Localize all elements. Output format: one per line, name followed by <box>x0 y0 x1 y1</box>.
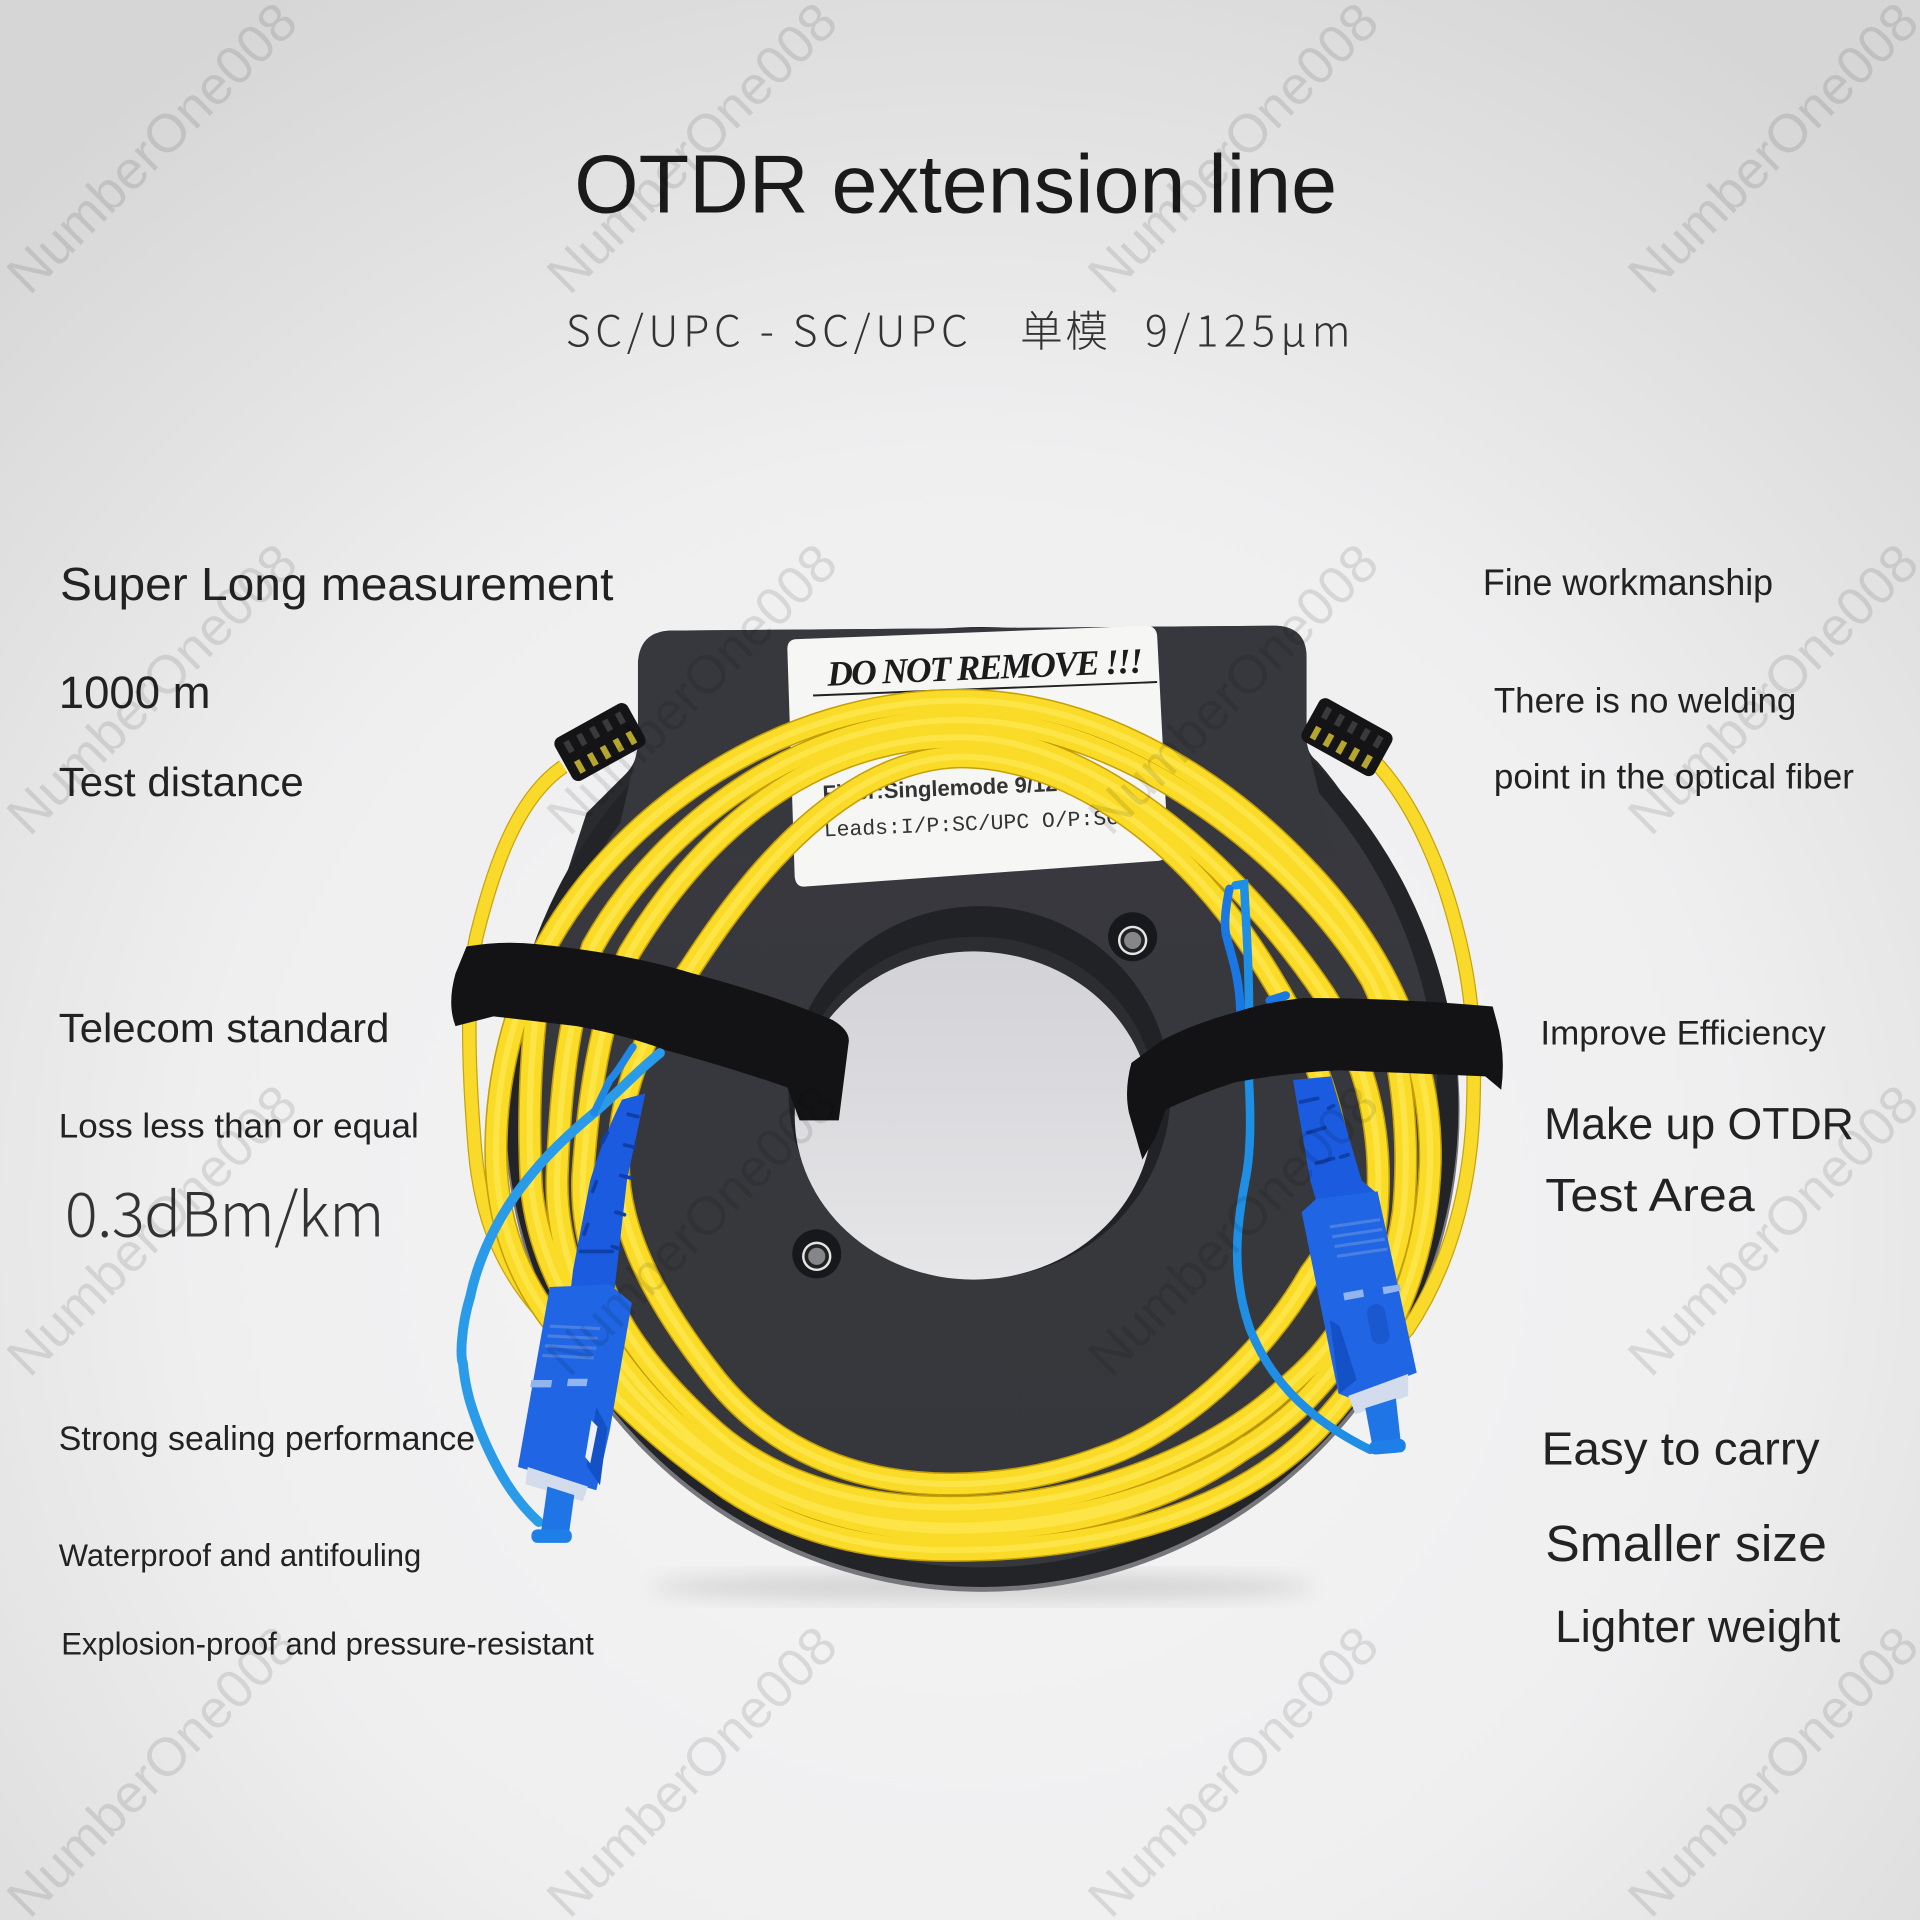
left column: telecom standard <box>59 1005 419 1255</box>
left column: sealing performance: Strong sealing performance <box>59 1420 475 1458</box>
watermark grid: NumberOne008 <box>1077 1615 1390 1920</box>
left column: telecom standard: Loss less than or equal <box>59 1108 419 1146</box>
right blue lanyard <box>1225 884 1370 1450</box>
yellow thin outer fiber loops <box>469 759 1474 1402</box>
watermark grid: NumberOne008 <box>1077 533 1390 846</box>
watermark grid: NumberOne008 <box>535 1074 849 1387</box>
right SC connector <box>1293 1076 1417 1455</box>
right column: improve efficiency: Improve Efficiency <box>1540 1014 1827 1052</box>
watermark grid: NumberOne008 <box>535 0 849 305</box>
right column: fine workmanship: point in the optical fiber <box>1494 757 1854 797</box>
reel label <box>787 626 1171 887</box>
right column: improve efficiency: Make up OTDR <box>1544 1100 1854 1149</box>
left velcro strap <box>451 943 849 1120</box>
reel label: Fiber:Singlemode 9/125um <box>822 769 1103 806</box>
left strain relief grommet <box>552 700 648 784</box>
left blue lanyard <box>461 1047 660 1522</box>
screw top right <box>1108 912 1157 961</box>
subtitle: 9/125μm <box>1145 298 1356 360</box>
screw bottom left <box>792 1229 841 1278</box>
right column: easy to carry: Easy to carry <box>1542 1422 1820 1474</box>
right column: easy to carry: Lighter weight <box>1555 1601 1841 1652</box>
right column: fine workmanship: Fine workmanship <box>1483 562 1773 603</box>
watermark grid: NumberOne008 <box>0 1074 309 1387</box>
subtitle: 单模 <box>1020 298 1111 360</box>
left column: telecom standard: Telecom standard <box>59 1005 389 1051</box>
reel shadow <box>651 1572 1313 1602</box>
left SC connector <box>518 1093 645 1543</box>
right column: easy to carry <box>1542 1422 1841 1652</box>
left column: sealing performance <box>59 1420 594 1661</box>
product: OTDR launch cable reel <box>451 626 1503 1602</box>
title: OTDR extension line <box>574 137 1337 230</box>
left column: telecom standard: 0.3dBm/km <box>65 1166 384 1255</box>
watermark grid: NumberOne008 <box>535 533 849 846</box>
watermark grid: NumberOne008 <box>1077 1074 1390 1387</box>
right column: easy to carry: Smaller size <box>1545 1514 1827 1572</box>
right velcro strap <box>1127 998 1503 1160</box>
watermark grid: NumberOne008 <box>1077 0 1390 305</box>
right column: fine workmanship <box>1483 562 1854 797</box>
left column: super long measurement: 1000 m <box>59 667 211 718</box>
reel body <box>504 626 1460 1592</box>
left column: sealing performance: Explosion-proof and pressure-resistant <box>61 1625 594 1661</box>
watermark grid: NumberOne008 <box>535 1615 849 1920</box>
subtitle: SC/UPC - SC/UPC <box>566 298 972 360</box>
right column: improve efficiency: Test Area <box>1545 1169 1755 1221</box>
right column: improve efficiency <box>1540 1014 1854 1221</box>
reel label: DO NOT REMOVE !!! <box>825 641 1144 694</box>
right column: fine workmanship: There is no welding <box>1494 681 1796 721</box>
left column: super long measurement <box>59 558 614 805</box>
reel label: Leads:I/P:SC/UPC O/P:SC/APC <box>823 805 1171 843</box>
left column: super long measurement: Test distance <box>59 759 304 805</box>
right strain relief grommet <box>1299 696 1395 779</box>
left column: super long measurement: Super Long measurement <box>60 558 614 610</box>
yellow fiber coil <box>496 700 1430 1550</box>
watermark grid: NumberOne008 <box>0 533 309 846</box>
left column: sealing performance: Waterproof and antifouling <box>59 1537 421 1573</box>
